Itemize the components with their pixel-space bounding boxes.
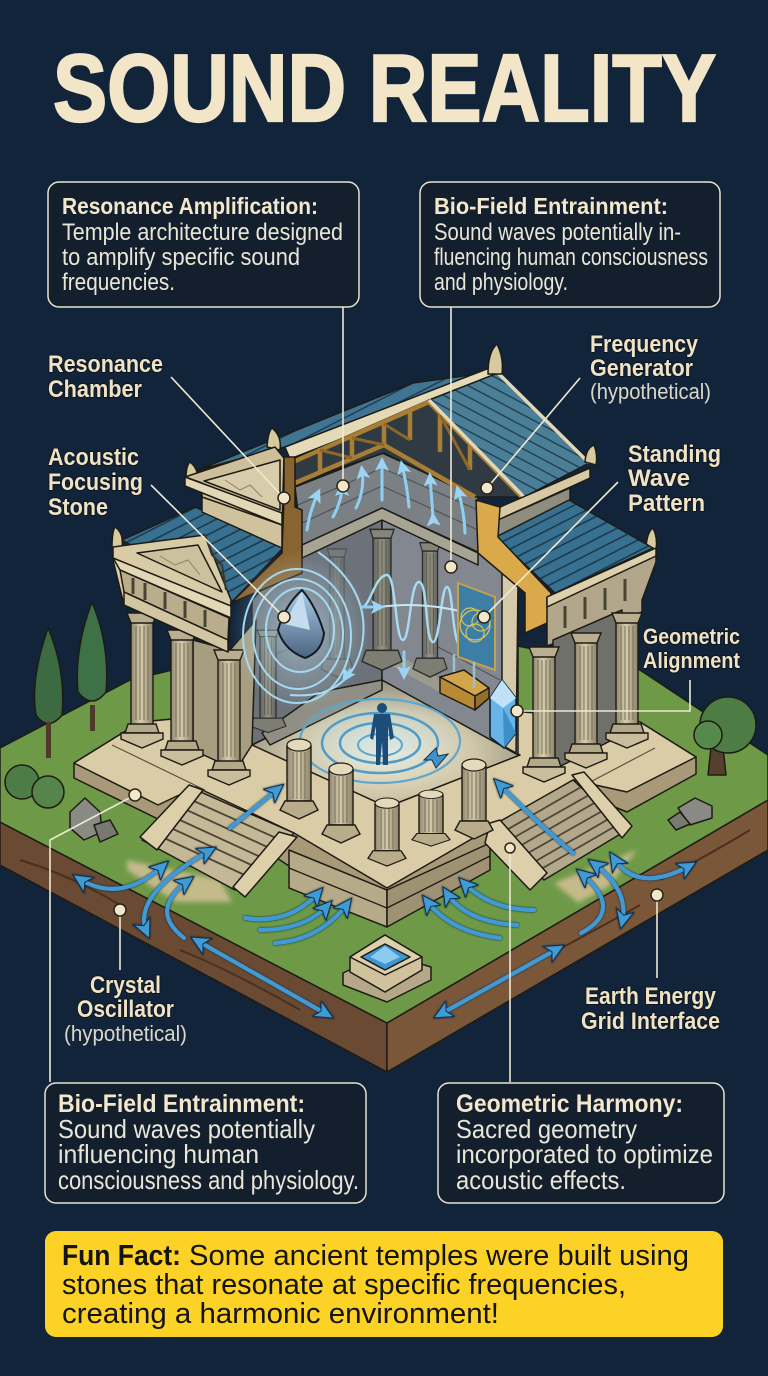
roof finials <box>112 344 657 550</box>
person with energy rings <box>295 696 465 783</box>
interior columns <box>250 529 447 733</box>
fun fact banner <box>45 1231 723 1337</box>
interior walls <box>252 508 518 755</box>
frequency generator chest <box>440 654 489 710</box>
label: standing wave pattern: Wave <box>628 465 690 492</box>
label: geometric alignment: Geometric <box>643 624 740 649</box>
callout: resonance amplification: frequencies. <box>62 269 175 296</box>
right gable wall <box>496 468 590 537</box>
energy crystal <box>490 680 516 748</box>
label: acoustic focusing stone: Focusing <box>48 469 143 496</box>
callout leader lines <box>50 307 690 1082</box>
callout: resonance amplification <box>48 182 359 307</box>
golden cut section right <box>476 500 551 633</box>
upper sound arrows <box>307 462 465 533</box>
label: acoustic focusing stone: Stone <box>48 494 108 521</box>
fun fact banner: Fun Fact: <box>62 1240 181 1272</box>
callout: bio-field entrainment top: Sound waves potentially in- <box>434 219 681 246</box>
callout: bio-field entrainment top: and physiology. <box>434 269 568 296</box>
label: standing wave pattern: Pattern <box>628 490 705 517</box>
left portico wall <box>193 620 256 770</box>
upper left gable <box>185 447 284 548</box>
left lower roof <box>122 507 283 603</box>
label: geometric alignment: Alignment <box>643 648 741 673</box>
callout: bio-field entrainment top <box>420 182 720 307</box>
ground energy arrows <box>78 783 691 1015</box>
isometric temple illustration <box>0 344 768 1072</box>
callout: geometric harmony: Sacred geometry <box>456 1114 637 1144</box>
label: earth energy grid interface <box>581 983 720 1035</box>
callout: bio-field entrainment bottom <box>45 1083 366 1203</box>
callout: geometric harmony: incorporated to optimize <box>456 1139 713 1169</box>
callout: bio-field entrainment top: fluencing human consciousness <box>434 244 708 271</box>
label: crystal oscillator <box>64 972 187 1046</box>
callout: geometric harmony: Geometric Harmony: <box>456 1090 683 1118</box>
exposed timber truss <box>293 400 522 497</box>
callout: bio-field entrainment bottom: influencing human <box>58 1139 259 1169</box>
label: crystal oscillator: Crystal <box>90 972 161 999</box>
standing wave <box>345 575 484 678</box>
label: crystal oscillator: (hypothetical) <box>64 1021 187 1046</box>
callout: bio-field entrainment bottom: Sound waves potentially <box>58 1114 315 1144</box>
callout: geometric harmony: acoustic effects. <box>456 1165 626 1195</box>
left colonnade <box>121 613 250 785</box>
trees and rocks <box>5 602 756 842</box>
label: resonance chamber: Resonance <box>48 351 163 378</box>
resonating stone and wave rings <box>230 550 370 710</box>
right colonnade <box>523 613 648 782</box>
label: frequency generator <box>590 331 711 404</box>
fun fact banner: Some ancient temples were built using <box>189 1240 689 1272</box>
callout: bio-field entrainment bottom: Bio-Field Entrainment: <box>58 1090 305 1118</box>
callout: resonance amplification: Resonance Amplification: <box>62 193 318 219</box>
label: crystal oscillator: Oscillator <box>77 996 174 1023</box>
back roof <box>198 367 497 470</box>
callout: resonance amplification: Temple architecture designed <box>62 219 343 246</box>
broken front columns <box>280 739 493 866</box>
right frieze <box>547 548 656 646</box>
fun fact banner: creating a harmonic environment! <box>62 1298 499 1330</box>
upper wall band <box>295 453 478 565</box>
label: frequency generator: Frequency <box>590 331 699 358</box>
label: acoustic focusing stone: Acoustic <box>48 444 139 471</box>
callout: bio-field entrainment top: Bio-Field Entrainment: <box>434 193 668 219</box>
callout: bio-field entrainment bottom: consciousness and physiology. <box>58 1165 359 1195</box>
timber cut section left <box>231 457 302 603</box>
left stairs <box>140 785 297 897</box>
temple platform <box>74 700 696 927</box>
right portico wall <box>553 610 622 770</box>
right stairs <box>485 772 632 890</box>
label: earth energy grid interface: Earth Energy <box>585 983 717 1010</box>
geometric panel <box>458 583 495 670</box>
callout: geometric harmony <box>438 1083 724 1203</box>
right lower roof <box>496 500 653 593</box>
label: resonance chamber: Chamber <box>48 376 142 403</box>
right upper roof <box>429 373 589 497</box>
label: standing wave pattern: Standing <box>628 441 721 468</box>
label: standing wave pattern <box>628 441 721 517</box>
callout: resonance amplification: to amplify specific sound <box>62 244 300 271</box>
terrain block <box>0 620 768 1072</box>
crystal oscillator pedestal <box>343 935 431 1002</box>
label: frequency generator: Generator <box>590 355 693 382</box>
interior floor <box>252 680 520 807</box>
left pediment and frieze <box>113 535 231 652</box>
fun fact banner: stones that resonate at specific frequencies, <box>62 1269 626 1301</box>
label: resonance chamber <box>48 351 163 403</box>
label: geometric alignment <box>643 624 741 673</box>
label: earth energy grid interface: Grid Interface <box>581 1008 720 1035</box>
label: frequency generator: (hypothetical) <box>590 379 711 404</box>
label: acoustic focusing stone <box>48 444 143 521</box>
